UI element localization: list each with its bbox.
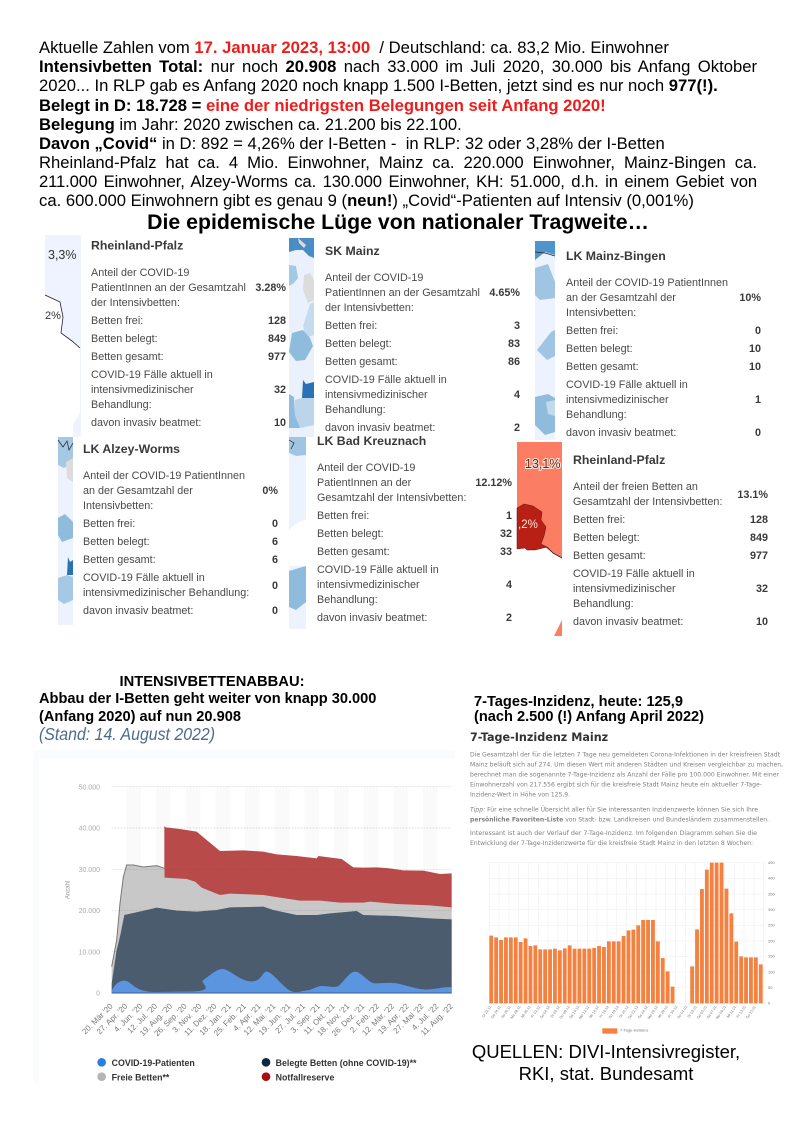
x axis labels: Fr 16.12. <box>599 1004 610 1019</box>
data rows: PatientInnen an der <box>317 477 412 489</box>
data rows: 0 <box>755 427 761 439</box>
data rows: 32 <box>500 528 512 540</box>
data rows: intensivmedizinischer <box>91 384 194 396</box>
data rows: 33 <box>500 546 512 558</box>
x axis labels: 27. Mai '22 <box>392 1001 426 1036</box>
data rows: Betten belegt: <box>566 343 633 355</box>
data rows: davon invasiv beatmet: <box>91 417 201 429</box>
legend <box>97 1058 417 1082</box>
x axis labels: Mo 28.11. <box>510 1004 522 1020</box>
data rows: davon invasiv beatmet: <box>573 616 683 628</box>
data rows: 849 <box>750 532 768 544</box>
area: Notfallreserve <box>164 826 452 910</box>
data rows: 32 <box>756 583 768 595</box>
heading: Intensivbettenabbau: INTENSIVBETTENABBAU: <box>120 674 304 690</box>
data rows: an der Gesamtzahl der <box>566 292 676 304</box>
x axis labels: Mi 30.11. <box>520 1004 532 1019</box>
x axis labels <box>481 1004 757 1020</box>
data rows: 977 <box>750 550 768 562</box>
x axis labels <box>80 1001 455 1038</box>
legend: 7-Tage-Inzidenz <box>620 1028 648 1033</box>
map sliver: LK Alzey-Worms <box>58 437 73 625</box>
data rows: Betten frei: <box>317 510 369 522</box>
x axis labels: Mi 28.12. <box>657 1004 669 1019</box>
x axis labels: 18. Jan. '21 <box>198 1001 233 1037</box>
x axis labels: Sa 10.12. <box>569 1004 581 1019</box>
data rows: 128 <box>268 315 286 327</box>
y axis labels <box>768 860 775 1006</box>
data rows <box>83 470 278 617</box>
data rows: Betten frei: <box>325 320 377 332</box>
data rows: Behandlung: <box>325 404 386 416</box>
data rows: COVID-19 Fälle aktuell in <box>566 379 688 391</box>
data rows <box>573 481 768 628</box>
map sliver: Rheinland-Pfalz <box>45 235 81 437</box>
x axis labels: Mo 12.12. <box>578 1004 591 1020</box>
x axis labels: Mo 09.01. <box>715 1004 728 1020</box>
data rows: COVID-19 Fälle aktuell in <box>573 568 695 580</box>
y axis labels: 300 <box>768 907 775 912</box>
sources <box>472 1041 740 1084</box>
data rows: Anteil der COVID-19 <box>325 272 423 284</box>
data rows: Anteil der COVID-19 PatientInnen <box>83 470 245 482</box>
data rows: Anteil der freien Betten an <box>573 481 698 493</box>
data rows: Betten gesamt: <box>91 351 164 363</box>
x axis labels: 11. Dez. '20 <box>182 1001 219 1038</box>
data rows: 13.1% <box>737 489 768 501</box>
data rows: COVID-19 Fälle aktuell in <box>325 374 447 386</box>
data rows: Intensivbetten: <box>83 500 153 512</box>
panel title: Rheinland-Pfalz <box>573 453 665 467</box>
area: Belegte Betten <box>112 907 452 993</box>
data rows: 0 <box>272 580 278 592</box>
data rows: Betten gesamt: <box>83 554 156 566</box>
line: covid share: Davon „Covid“ in D: 892 = 4,26% der I-Betten - in RLP: 32 oder 3,28% der I-Betten <box>39 134 665 153</box>
data rows: COVID-19 Fälle aktuell in <box>317 564 439 576</box>
x axis labels: 3. Sep. '21 <box>289 1001 322 1035</box>
panel: Rheinland-Pfalz free beds <box>517 442 768 636</box>
x axis labels: Di 03.01. <box>687 1004 698 1019</box>
map sliver: LK Bad Kreuznach <box>289 437 306 629</box>
legend: Notfallreserve <box>276 1072 334 1082</box>
legend: COVID-19-Patienten <box>112 1058 195 1068</box>
data rows: Gesamtzahl der Intensivbetten: <box>573 496 722 508</box>
x axis labels: 11. Aug. '22 <box>419 1001 455 1037</box>
panel title: SK Mainz <box>325 244 380 258</box>
sources: RKI, stat. Bundesamt <box>519 1063 693 1084</box>
x axis labels: Fr 13.01. <box>736 1004 747 1019</box>
text block: current figures <box>39 38 757 210</box>
data rows: 1 <box>755 394 761 406</box>
map sliver: SK Mainz <box>289 238 314 437</box>
line: population 1: Rheinland-Pfalz hat ca. 4 Mio. Einwohner, Mainz ca. 220.000 Einwohner, Mainz-Bingen ca. <box>39 153 757 172</box>
y axis labels: 50.000 <box>79 785 100 792</box>
data rows: Betten gesamt: <box>317 546 390 558</box>
x axis labels: 26. Dez. '21 <box>330 1001 367 1038</box>
x axis labels: So 04.12. <box>539 1004 551 1019</box>
y axis labels: 30.000 <box>79 867 100 874</box>
data rows: 1 <box>506 510 512 522</box>
x axis labels: Do 24.11. <box>490 1004 502 1019</box>
data rows: 10 <box>274 417 286 429</box>
map sliver: Rheinland-Pfalz: 2% <box>45 310 61 322</box>
article paragraphs: Interessant ist auch der Verlauf der 7-Tage-Inzidenz. Im folgenden Diagramm sehen Sie die <box>470 830 757 837</box>
data rows: 86 <box>508 356 520 368</box>
data rows: davon invasiv beatmet: <box>317 612 427 624</box>
data rows: der Intensivbetten: <box>325 302 414 314</box>
x axis labels: So 01.01. <box>677 1004 689 1019</box>
panel: SK Mainz <box>289 238 520 437</box>
data rows: intensivmedizinischer <box>566 394 669 406</box>
data rows: Betten gesamt: <box>325 356 398 368</box>
data rows: 4.65% <box>489 287 520 299</box>
line: total intensive beds: Intensivbetten Total: nur noch 20.908 nach 33.000 im Juli 2020, 30.000 bis Anfang Oktober <box>39 57 757 76</box>
chart: 7-day incidence bars <box>481 860 775 1034</box>
x axis labels: 3. Nov. '20 <box>171 1001 204 1035</box>
x axis labels: Mo 26.12. <box>647 1004 659 1020</box>
data rows: 4 <box>514 389 520 401</box>
data rows: intensivmedizinischer <box>573 583 676 595</box>
x axis labels: 4. Jun. '20 <box>112 1001 145 1034</box>
y axis labels: 0 <box>96 990 100 997</box>
data rows: intensivmedizinischer <box>317 579 420 591</box>
data rows: intensivmedizinischer <box>325 389 428 401</box>
x axis labels: Mi 14.12. <box>589 1004 600 1019</box>
panel title: Rheinland-Pfalz <box>91 238 183 252</box>
x axis labels: 18. Nov. '21 <box>315 1001 352 1038</box>
panel title: LK Alzey-Worms <box>83 442 180 456</box>
article title: 7-Tage-Inzidenz Mainz <box>470 731 608 744</box>
line: date and population: Aktuelle Zahlen vom 17. Januar 2023, 13:00 / Deutschland: ca. 83,2 Mio. Einwohner <box>39 38 669 57</box>
x axis labels: 4. Jul. '22 <box>410 1001 441 1032</box>
data rows: 6 <box>272 554 278 566</box>
data rows: 0% <box>262 485 278 497</box>
x axis labels: Di 22.11. <box>481 1004 493 1018</box>
data rows: Behandlung: <box>573 598 634 610</box>
x axis labels: 11. Okt. '21 <box>302 1001 337 1036</box>
data rows: 4 <box>506 579 512 591</box>
y axis labels: 150 <box>768 954 775 959</box>
data rows: Behandlung: <box>566 409 627 421</box>
y axis labels: 400 <box>768 876 775 881</box>
x axis labels: 27. Jul. '21 <box>274 1001 307 1035</box>
data rows: Betten gesamt: <box>566 361 639 373</box>
line: RLP beds: 2020... In RLP gab es Anfang 2020 noch knapp 1.500 I-Betten, jetzt sind es nur noch 977(!). <box>39 76 718 95</box>
panel: Rheinland-Pfalz COVID share <box>45 235 286 437</box>
map sliver: free beds <box>517 442 562 636</box>
x axis labels: Do 08.12. <box>559 1004 571 1020</box>
data rows: 977 <box>268 351 286 363</box>
legend <box>602 1028 648 1034</box>
sources: QUELLEN: DIVI-Intensivregister, <box>472 1041 740 1062</box>
x axis labels: So 15.01. <box>745 1004 757 1019</box>
data rows: der Intensivbetten: <box>91 297 180 309</box>
data rows: Betten frei: <box>83 518 135 530</box>
x axis labels: Mi 11.01. <box>726 1004 738 1019</box>
main heading: Die epidemische Lüge von nationaler Tragweite… <box>147 210 649 234</box>
y axis labels: 250 <box>768 923 775 928</box>
chart: intensive beds stacked area <box>65 784 455 1082</box>
data rows: Anteil der COVID-19 <box>317 462 415 474</box>
x axis labels: 4. Apr. '21 <box>231 1001 263 1033</box>
line: population 3: ca. 600.000 Einwohnern gibt es genau 9 (neun!) „Covid“-Patienten auf Intensiv (0,001%) <box>39 191 694 210</box>
data rows: PatientInnen an der Gesamtzahl <box>325 287 480 299</box>
data rows: 3.28% <box>255 282 286 294</box>
data rows: davon invasiv beatmet: <box>325 422 435 434</box>
data rows: 2 <box>514 422 520 434</box>
y axis labels <box>66 785 100 997</box>
data rows: Betten gesamt: <box>573 550 646 562</box>
data rows: 128 <box>750 514 768 526</box>
data rows <box>325 272 520 434</box>
article: 7-Tage-Inzidenz Mainz text <box>470 731 783 847</box>
data rows: 0 <box>272 518 278 530</box>
x axis labels: 26. Sep. '20 <box>152 1001 189 1038</box>
note: date stand: (Stand: 14. August 2022) <box>39 724 215 744</box>
panel title: LK Bad Kreuznach <box>317 434 426 448</box>
panel title: LK Mainz-Bingen <box>566 249 666 263</box>
y axis labels: 20.000 <box>79 908 100 915</box>
x axis labels: Fr 30.12. <box>667 1004 679 1019</box>
panel: LK Mainz-Bingen <box>535 241 761 440</box>
data rows: 10 <box>749 361 761 373</box>
area: COVID-19-Patienten <box>112 969 452 993</box>
legend: Freie Betten** <box>112 1072 170 1082</box>
data rows: 6 <box>272 536 278 548</box>
heading: Intensivbettenabbau <box>39 674 376 725</box>
y axis labels: Anzahl <box>66 881 72 899</box>
x axis labels: Do 22.12. <box>627 1004 640 1020</box>
data rows: Betten belegt: <box>325 338 392 350</box>
data rows: intensivmedizinischer Behandlung: <box>83 587 249 599</box>
data rows: Anteil der COVID-19 PatientInnen <box>566 277 728 289</box>
x axis labels: Di 20.12. <box>618 1004 630 1019</box>
y axis labels: 450 <box>768 860 775 865</box>
article paragraphs: Mainz beläuft sich auf 274. Um diesen Wert mit anderen Städten und Kreisen vergleichbar zu machen, <box>470 762 783 768</box>
article paragraphs: Die Gesamtzahl der für die letzten 7 Tage neu gemeldeten Corona-Infektionen in der kreisfreien Stadt <box>470 752 781 758</box>
bars <box>489 863 763 1003</box>
data rows: 32 <box>274 384 286 396</box>
data rows: an der Gesamtzahl der <box>83 485 193 497</box>
panel: LK Alzey-Worms <box>58 437 278 625</box>
x axis labels: 2. Feb. '22 <box>348 1001 381 1035</box>
data rows: 10% <box>739 292 761 304</box>
area: Freie Betten <box>112 865 452 993</box>
y axis labels: 350 <box>768 891 775 896</box>
data rows <box>566 277 761 439</box>
y axis labels: 50 <box>768 985 773 990</box>
article paragraphs <box>470 752 783 847</box>
data rows: Intensivbetten: <box>566 307 636 319</box>
x axis labels: 20. Mär '20 <box>80 1001 115 1036</box>
y axis labels: 200 <box>768 938 775 943</box>
x axis labels: 25. Feb. '21 <box>212 1001 248 1038</box>
x axis labels: 12. Mai. '21 <box>242 1001 278 1037</box>
x axis labels: Sa 07.01. <box>706 1004 718 1019</box>
article paragraphs: persönliche Favoriten-Liste von Stadt- bzw. Landkreisen und Bundesländern zusammenstellen. <box>470 816 769 824</box>
data rows: Anteil der COVID-19 <box>91 267 189 279</box>
data rows: COVID-19 Fälle aktuell in <box>91 369 213 381</box>
line: occupancy 2020: Belegung im Jahr: 2020 zwischen ca. 21.200 bis 22.100. <box>39 115 462 134</box>
heading: Intensivbettenabbau: (Anfang 2020) auf nun 20.908 <box>39 709 241 725</box>
data rows: 3 <box>514 320 520 332</box>
data rows: Betten belegt: <box>83 536 150 548</box>
x axis labels: 12. Mär. '22 <box>360 1001 396 1037</box>
article paragraphs: berechnet man die sogenannte 7-Tage-Inzidenz als Anzahl der Fälle pro 100.000 Einwohner. Mit einer <box>470 772 780 778</box>
data rows: 2 <box>506 612 512 624</box>
x axis labels: Fr 02.12. <box>530 1004 542 1019</box>
line: occupied beds: Belegt in D: 18.728 = eine der niedrigsten Belegungen seit Anfang 2020! <box>39 96 606 115</box>
data rows: 10 <box>749 343 761 355</box>
data rows: 0 <box>755 325 761 337</box>
data rows: Betten belegt: <box>317 528 384 540</box>
heading: Intensivbettenabbau: Abbau der I-Betten geht weiter von knapp 30.000 <box>39 691 376 707</box>
article paragraphs: Inzidenz-Wert in Höhe von 125,9. <box>470 792 570 798</box>
panel: LK Bad Kreuznach <box>289 434 512 629</box>
map sliver: Rheinland-Pfalz: 3,3% <box>48 248 76 262</box>
heading: 7-Tages-Inzidenz: (nach 2.500 (!) Anfang April 2022) <box>474 709 704 725</box>
data rows: PatientInnen an der Gesamtzahl <box>91 282 246 294</box>
legend: Belegte Betten (ohne COVID-19)** <box>276 1058 417 1068</box>
data rows: 849 <box>268 333 286 345</box>
x axis labels: Sa 24.12. <box>637 1004 649 1019</box>
article paragraphs: Entwicklung der 7-Tage-Inzidenzwerte für die kreisfreie Stadt Mainz in den letzten 8 Wochen: <box>470 840 753 847</box>
article paragraphs: Einwohnerzahl von 217.556 ergibt sich für die kreisfreie Stadt Mainz heute ein aktueller 7-Tage- <box>470 782 762 788</box>
x axis labels: 19. Aug. '20 <box>138 1001 174 1038</box>
y axis labels: 100 <box>768 969 775 974</box>
data rows: Behandlung: <box>91 399 152 411</box>
heading: 7-Tages-Inzidenz: 7-Tages-Inzidenz, heute: 125,9 <box>474 694 683 710</box>
data rows: Betten belegt: <box>573 532 640 544</box>
data rows: Gesamtzahl der Intensivbetten: <box>317 492 466 504</box>
y axis labels: 10.000 <box>79 949 100 956</box>
data rows: Behandlung: <box>317 594 378 606</box>
x axis labels: 12. Jul. '20 <box>126 1001 159 1035</box>
data rows: davon invasiv beatmet: <box>566 427 676 439</box>
x axis labels: So 18.12. <box>608 1004 620 1019</box>
map sliver: free beds: 13,1% <box>525 457 560 471</box>
x axis labels: 19. Apr. '22 <box>376 1001 411 1036</box>
outline of free beds <box>112 865 164 967</box>
article paragraphs: Tipp: Für eine schnelle Übersicht aller für Sie interessanten Inzidenzwerte können Sie sich Ihre <box>470 806 758 814</box>
data rows: 10 <box>756 616 768 628</box>
data rows: davon invasiv beatmet: <box>83 605 193 617</box>
data rows <box>317 462 512 624</box>
data rows: Betten frei: <box>91 315 143 327</box>
data rows: Betten belegt: <box>91 333 158 345</box>
data rows: 0 <box>272 605 278 617</box>
map sliver: free beds: ,2% <box>518 519 538 531</box>
x axis labels: Di 06.12. <box>550 1004 561 1019</box>
data rows: Betten frei: <box>566 325 618 337</box>
data rows: 83 <box>508 338 520 350</box>
x axis labels: 19. Jun. '21 <box>257 1001 293 1037</box>
data rows: Betten frei: <box>573 514 625 526</box>
y axis labels: 0 <box>768 1001 771 1006</box>
map sliver: LK Mainz-Bingen <box>535 241 555 440</box>
data rows: 12.12% <box>475 477 512 489</box>
x axis labels: Do 05.01. <box>696 1004 708 1020</box>
data rows <box>91 267 286 429</box>
data rows: COVID-19 Fälle aktuell in <box>83 572 205 584</box>
x axis labels: Sa 26.11. <box>500 1004 512 1019</box>
x axis labels: 27. Apr. '20 <box>95 1001 130 1036</box>
line: population 2: 211.000 Einwohner, Alzey-Worms ca. 130.000 Einwohner, KH: 51.000, d.h. in einem Gebiet von <box>39 172 757 191</box>
y axis labels: 40.000 <box>79 826 100 833</box>
heading: 7-Tages-Inzidenz <box>474 694 704 725</box>
